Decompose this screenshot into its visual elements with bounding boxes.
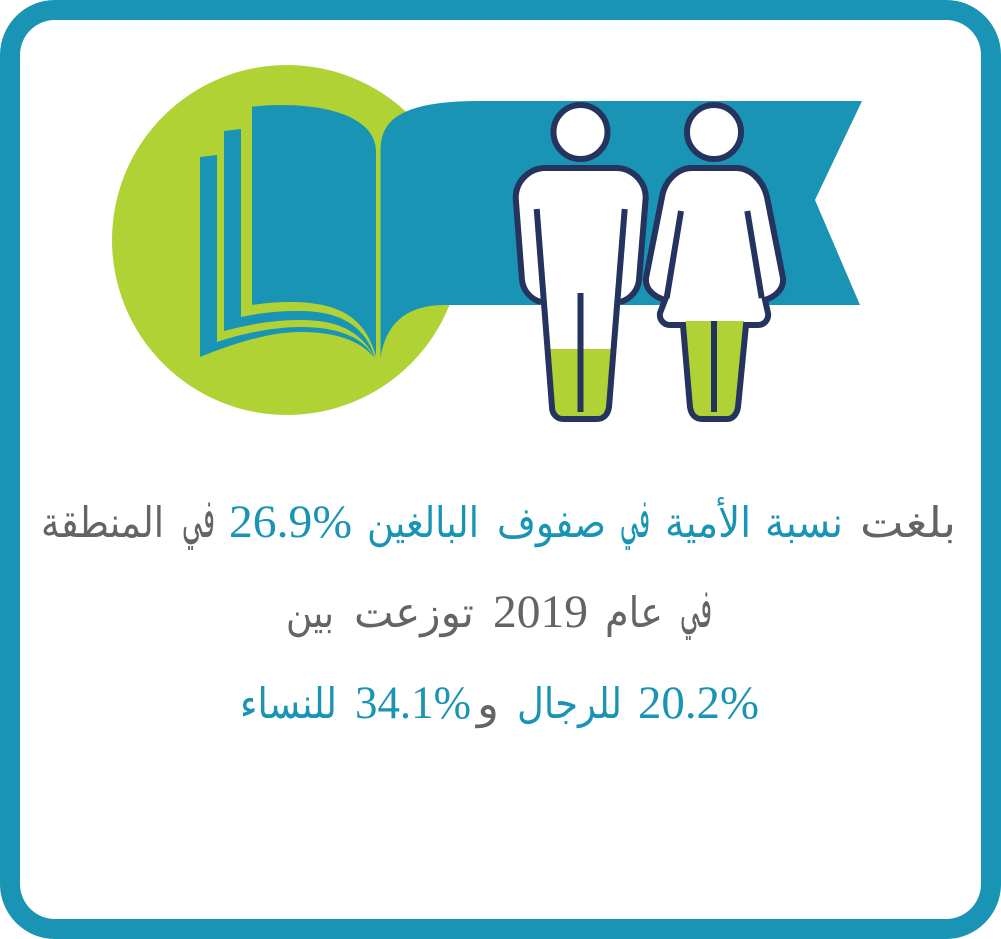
text: line 2: بين: [286, 591, 334, 637]
text: line 3: 20.2%: [638, 677, 759, 729]
man fill level: [550, 349, 611, 416]
text: line 3: 34.1%: [355, 677, 471, 729]
text: line 2: [286, 579, 712, 640]
text: line 3: للنساء: [240, 682, 337, 728]
ribbon with right book page: [380, 101, 862, 358]
text: line 1: صفوف: [497, 501, 606, 547]
icon: open book left pages: [200, 105, 376, 359]
text: line 1: بلغت: [860, 501, 956, 547]
text: line 1: نسبة: [765, 501, 843, 547]
text: line 2: عام: [605, 591, 663, 637]
text: line 1: في: [182, 489, 215, 550]
woman head: [687, 105, 741, 159]
icon: green circle: [112, 65, 462, 415]
text: line 2: توزعت: [354, 591, 474, 637]
text: line 1: الأمية: [665, 496, 751, 547]
woman outline: [646, 168, 783, 419]
man body: [516, 168, 646, 419]
text: line 3: [240, 677, 759, 729]
text: line 1: 26.9%: [229, 496, 352, 548]
text: line 1: البالغين: [367, 501, 479, 547]
icon: woman figure: [646, 105, 783, 419]
icon: man figure: [516, 105, 646, 419]
infographic: في: [680, 579, 712, 640]
text: line 1: المنطقة: [41, 501, 164, 547]
man head: [554, 105, 608, 159]
text: line 1: [41, 489, 956, 550]
text: line 3: و: [475, 682, 499, 728]
man outline: [516, 168, 646, 419]
woman body: [646, 168, 783, 419]
text: line 2: 2019: [493, 586, 588, 638]
text: line 3: للرجال: [517, 682, 622, 728]
text: line 1: في: [620, 489, 650, 550]
woman fill level: [686, 321, 744, 416]
